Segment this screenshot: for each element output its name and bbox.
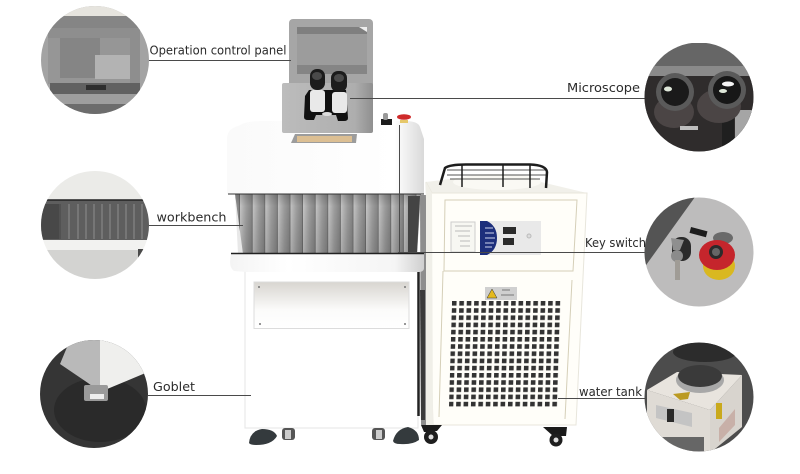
laser welding machine — [227, 19, 426, 445]
label: operation control panel: Operation control panel — [150, 44, 286, 58]
emergency stop on machine — [397, 114, 411, 123]
chiller casters — [421, 425, 567, 446]
leader lines — [148, 60, 645, 398]
label: microscope: Microscope — [567, 81, 640, 95]
panel seams — [439, 200, 577, 419]
temperature controller — [480, 221, 541, 255]
vent holes — [449, 301, 562, 407]
bellows workbench — [228, 194, 424, 254]
inset: goblet foot — [40, 340, 148, 448]
beige plate — [291, 134, 357, 143]
fan housing top — [426, 177, 587, 195]
label: water tank: water tank — [579, 385, 642, 399]
label sheet — [451, 222, 475, 252]
inset: key switch — [644, 197, 754, 307]
gap behind machine — [420, 195, 426, 425]
tray — [230, 253, 424, 272]
key switch on machine — [381, 113, 392, 125]
inset: water tank — [644, 342, 754, 453]
cabinet body — [426, 182, 587, 425]
inset: operation control panel — [41, 6, 149, 116]
inset: microscope — [644, 43, 755, 155]
microscope on machine — [304, 69, 348, 121]
main head housing — [227, 121, 424, 194]
label: key switch: Key switch — [585, 236, 646, 250]
fan guard — [440, 164, 547, 188]
feet and casters — [249, 427, 419, 445]
warning label — [485, 287, 517, 300]
inset: workbench — [41, 171, 150, 279]
label: workbench: workbench — [156, 210, 226, 224]
operation control panel housing — [289, 19, 373, 89]
label: goblet: Goblet — [153, 380, 195, 394]
cabinet panel — [254, 282, 409, 328]
lower cabinet — [245, 270, 418, 428]
microscope mount — [282, 83, 373, 133]
water chiller — [421, 164, 587, 446]
